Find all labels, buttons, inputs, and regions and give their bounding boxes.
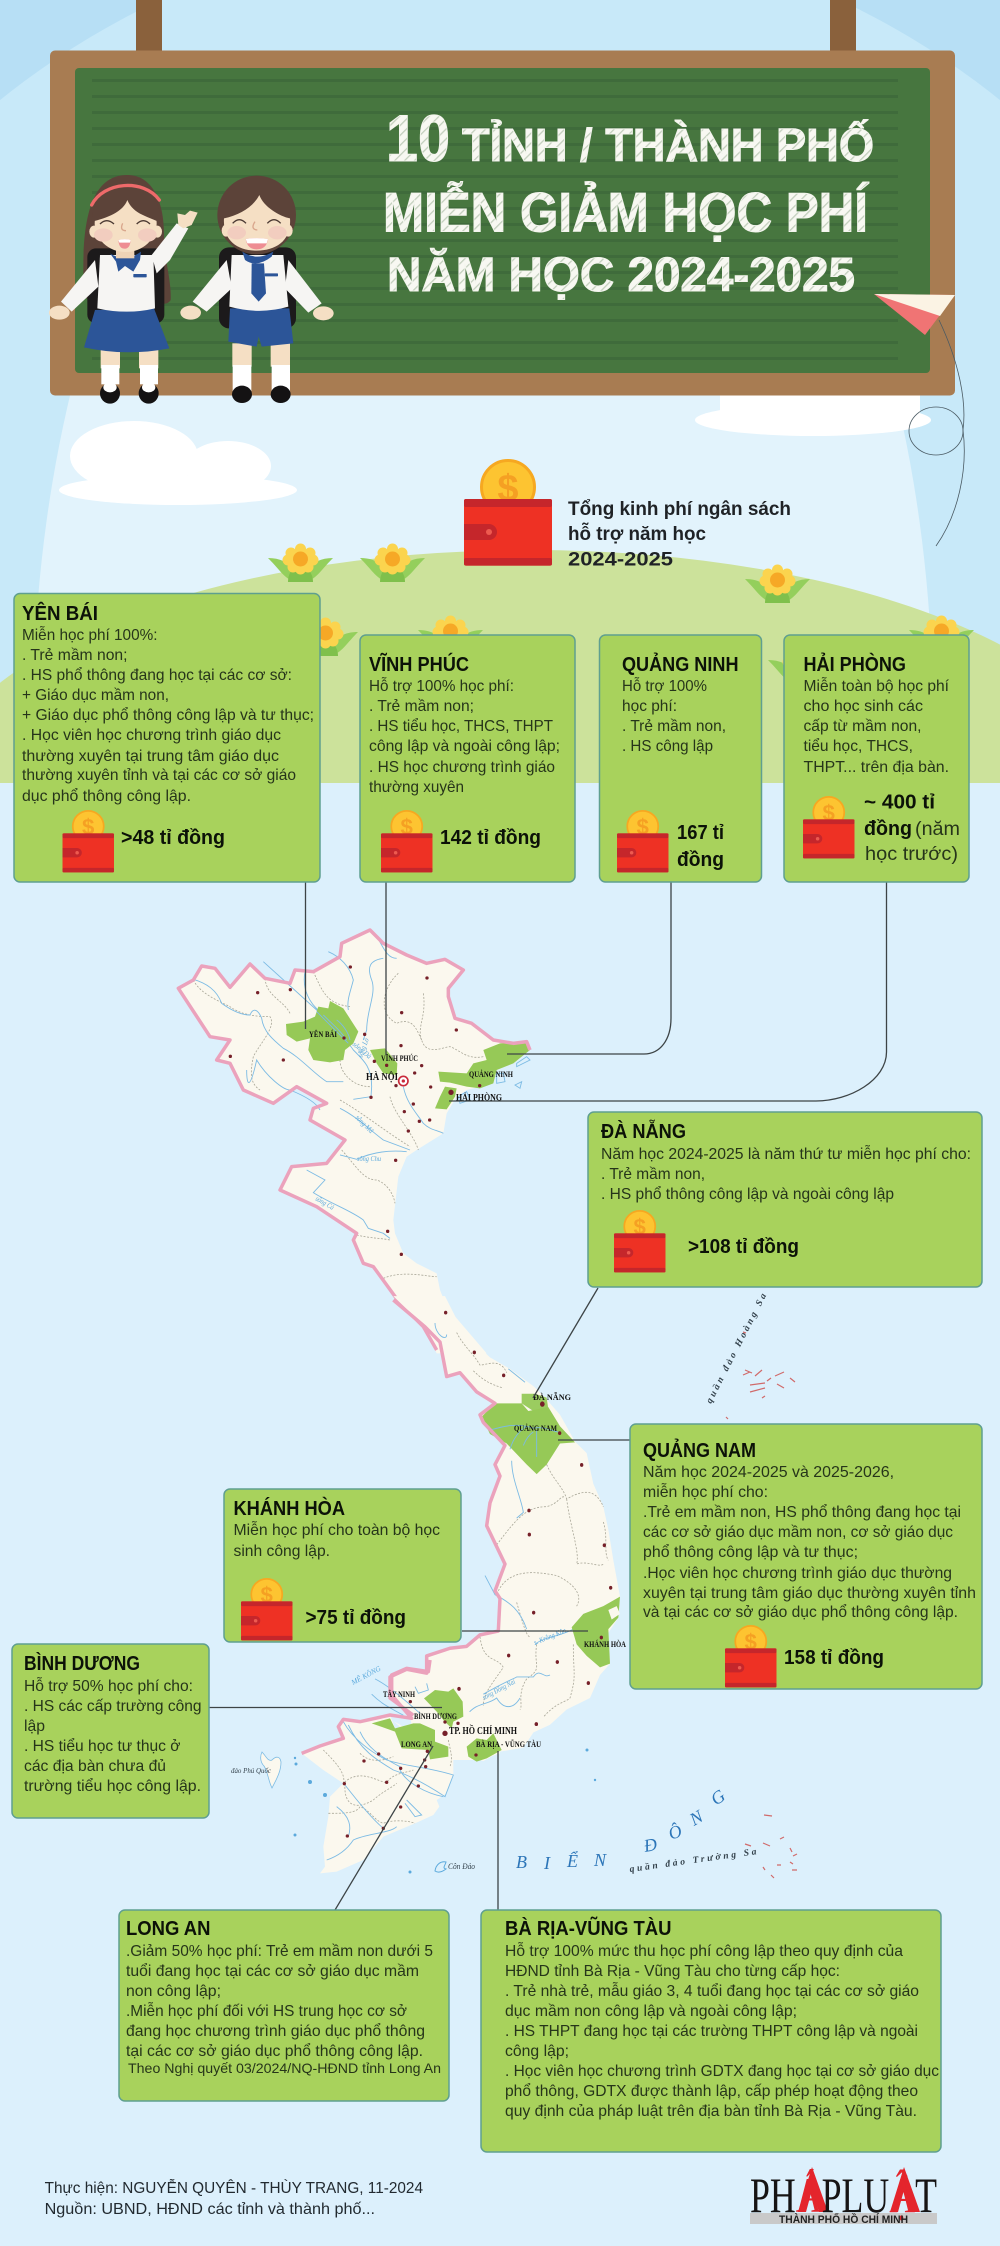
heading: Quảng Ninh: QUẢNG NINH [622, 653, 738, 676]
text: Yên Bái details: . Trẻ mầm non; [22, 647, 128, 664]
text: Vĩnh Phúc details: . HS học chương trình giáo [369, 759, 555, 776]
map place labels: sông Chu [357, 1154, 381, 1163]
map place labels: N [685, 1806, 707, 1830]
text: Quảng Nam details: .Trẻ em mầm non, HS phổ thông đang học tại [643, 1503, 961, 1521]
map place labels: BÀ RỊA - VŨNG TÀU [476, 1739, 541, 1749]
map place labels: HÀ NỘI [366, 1070, 398, 1083]
heading: Long An: LONG AN [126, 1918, 210, 1940]
title: NĂM HỌC 2024-2025 [387, 248, 855, 302]
text: Long An details [126, 1943, 433, 2060]
text: Bà Rịa-Vũng Tàu details: HĐND tỉnh Bà Rịa - Vũng Tàu cho từng cấp học: [505, 1963, 840, 1980]
text: Bà Rịa-Vũng Tàu details: dục mầm non công lập và ngoài công lập; [505, 2003, 797, 2020]
map place labels: Ô [665, 1820, 685, 1844]
note: legal reference: Theo Nghị quyết 03/2024/NQ-HĐND tỉnh Long An [128, 2060, 441, 2076]
amount: Đà Nẵng: >108 tỉ đồng [688, 1236, 799, 1258]
text: Hải Phòng details: Miễn toàn bộ học phí [804, 676, 950, 695]
text: Yên Bái details [22, 625, 314, 805]
text: Hải Phòng details: THPT... trên địa bàn. [804, 759, 949, 776]
title: 10 [386, 101, 450, 175]
map place labels: Côn Đảo [448, 1862, 475, 1871]
map: northern region [178, 930, 530, 1353]
heading: Hải Phòng: HẢI PHÒNG [804, 652, 906, 676]
text: Bình Dương details: . HS các cấp trường công [24, 1698, 202, 1715]
map place labels: TÂY NINH [383, 1689, 415, 1699]
map place labels: B [516, 1852, 527, 1872]
connector lines from panels to map [209, 882, 886, 1910]
logo: Pháp Luật: THÀNH PHỐ HỒ CHÍ MINH [779, 2212, 908, 2226]
text: Bình Dương details: . HS tiểu học tư thục ở [24, 1737, 181, 1755]
legend text: Tổng kinh phí ngân sách [568, 499, 791, 520]
text: Yên Bái details: thường xuyên tại trung tâm giáo dục [22, 748, 279, 765]
text: Bình Dương details [24, 1676, 202, 1795]
panel: Bình Dương [12, 1644, 209, 1818]
panel: Quảng Nam [630, 1424, 982, 1689]
title: TỈNH / THÀNH PHỐ [462, 119, 874, 171]
text: Yên Bái details: . HS phổ thông đang học tại các cơ sở: [22, 666, 292, 684]
amount: Hải Phòng [864, 792, 960, 865]
map place labels: Ể [566, 1850, 578, 1871]
text: Quảng Nam details: .Học viên học chương trình giáo dục thường [643, 1565, 952, 1582]
text: Quảng Ninh details: học phí: [622, 698, 677, 715]
map place labels: sông Đà [351, 1040, 374, 1061]
panel: Quảng Ninh [600, 635, 762, 882]
red island markers [726, 1332, 797, 1878]
flowers on hill [268, 544, 974, 684]
text: Yên Bái details: dục phổ thông công lập. [22, 787, 191, 805]
student girl [49, 175, 198, 404]
text: Quảng Nam details: và tại các cơ sở giáo dục phổ thông công lập. [643, 1603, 958, 1621]
credits and source [45, 2178, 423, 2218]
text: Khánh Hòa details [234, 1520, 440, 1560]
map of Vietnam [178, 930, 797, 1878]
icon: wallet Quảng Ninh [617, 811, 668, 872]
text: Quảng Ninh details: Hỗ trợ 100% [622, 676, 707, 695]
text: Quảng Ninh details: . Trẻ mầm non, [622, 718, 726, 735]
heading: Đà Nẵng: ĐÀ NẴNG [601, 1120, 686, 1143]
icon: wallet Yên Bái [63, 811, 114, 872]
amount: Hải Phòng: (năm [915, 819, 960, 840]
heading: Bà Rịa-Vũng Tàu: BÀ RỊA-VŨNG TÀU [505, 1916, 672, 1940]
map place labels [231, 1029, 769, 1875]
text: Quảng Nam details: các cơ sở giáo dục mầm non, cơ sở giáo dục [643, 1524, 953, 1541]
text: Quảng Nam details: xuyên tại trung tâm giáo dục thường xuyên tỉnh [643, 1585, 976, 1602]
text: Đà Nẵng details: Năm học 2024-2025 là năm thứ tư miễn học phí cho: [601, 1144, 971, 1163]
amount: Khánh Hòa: >75 tỉ đồng [306, 1607, 406, 1629]
text: Hải Phòng details [804, 676, 950, 776]
icon: wallet Đà Nẵng [614, 1211, 665, 1272]
map place labels: ĐÀ NẴNG [533, 1392, 571, 1402]
text: Hải Phòng details: cho học sinh các [804, 698, 923, 715]
map place labels: Đ [641, 1834, 658, 1856]
text: Yên Bái details: + Giáo dục mầm non, [22, 687, 169, 704]
text: Quảng Ninh details [622, 676, 726, 755]
panel: Long An [119, 1910, 449, 2101]
text: Long An details: non công lập; [126, 1983, 221, 2000]
text: Bình Dương details: Hỗ trợ 50% học phí cho: [24, 1676, 193, 1695]
text: Bà Rịa-Vũng Tàu details: công lập; [505, 2043, 569, 2060]
islands [261, 1332, 797, 1878]
credits and source: Nguồn: UBND, HĐND các tỉnh và thành phố... [45, 2201, 375, 2218]
map place labels: YÊN BÁI [309, 1029, 338, 1039]
map place labels: đảo Phú Quốc [231, 1766, 272, 1775]
text: Đà Nẵng details [601, 1144, 971, 1203]
text: Quảng Ninh details: . HS công lập [622, 738, 713, 755]
text: Yên Bái details: thường xuyên tỉnh và tại các cơ sở giáo [22, 767, 296, 784]
title: MIỄN GIẢM HỌC PHÍ [383, 180, 869, 244]
amount: Quảng Ninh: đồng [677, 849, 724, 871]
chalkboard [50, 50, 955, 396]
text: Vĩnh Phúc details: thường xuyên [369, 779, 464, 796]
text: Khánh Hòa details: sinh công lập. [234, 1543, 330, 1560]
text: Bà Rịa-Vũng Tàu details: . HS THPT đang học tại các trường THPT công lập và ngoài [505, 2023, 918, 2040]
text: Vĩnh Phúc details [369, 676, 560, 796]
paper plane with trail [874, 294, 964, 546]
text: Bình Dương details: trường tiểu học công lập. [24, 1777, 201, 1795]
text: Yên Bái details: Miễn học phí 100%: [22, 625, 158, 644]
map place labels: G [707, 1785, 729, 1809]
text: Long An details: .Miễn học phí đối với HS trung học cơ sở [126, 2001, 407, 2020]
map: central and southern region [372, 1296, 620, 1761]
text: Long An details: đang học chương trình giáo dục phổ thông [126, 2022, 425, 2040]
map place labels: MÊ KÔNG [348, 1663, 383, 1687]
text: Bà Rịa-Vũng Tàu details: . Học viên học chương trình GDTX đang học tại cơ sở giáo dục [505, 2063, 939, 2080]
logo: Pháp Luật: PHÁPLUẬT [750, 2167, 937, 2223]
text: Long An details: tuổi đang học tại các cơ sở giáo dục mầm [126, 1962, 419, 1980]
amount: Quảng Ninh: 167 tỉ [677, 822, 724, 844]
hill [0, 550, 1000, 783]
map place labels: HẢI PHÒNG [456, 1092, 503, 1104]
total budget legend [464, 460, 791, 570]
legend text: 2024-2025 [568, 550, 673, 570]
panel: Khánh Hòa [224, 1489, 461, 1642]
map place labels: s. Krông Kôn [532, 1626, 567, 1647]
amount: Hải Phòng: ~ 400 tỉ [864, 792, 935, 814]
map place labels: quần đảo Trường Sa [629, 1846, 757, 1875]
text: Bà Rịa-Vũng Tàu details: phổ thông, GDTX được thành lập, cấp phép hoạt động theo [505, 2082, 918, 2100]
text: Quảng Nam details: Năm học 2024-2025 và 2025-2026, [643, 1464, 894, 1481]
text: Bình Dương details: lập [24, 1718, 45, 1735]
map place labels: sông Cả [314, 1194, 336, 1212]
text: Vĩnh Phúc details: . HS tiểu học, THCS, THPT [369, 717, 553, 735]
map place labels: QUẢNG NAM [514, 1423, 557, 1433]
map place labels: N [593, 1850, 607, 1870]
icon: wallet Vĩnh Phúc [381, 811, 432, 872]
student boy [180, 176, 334, 403]
amount: Quảng Nam: 158 tỉ đồng [784, 1647, 884, 1669]
map place labels: LONG AN [401, 1739, 433, 1749]
text: Vĩnh Phúc details: Hỗ trợ 100% học phí: [369, 676, 514, 695]
heading: Quảng Nam: QUẢNG NAM [643, 1439, 756, 1462]
panel: Bà Rịa-Vũng Tàu [481, 1910, 941, 2152]
map place labels: TP. HỒ CHÍ MINH [449, 1724, 517, 1737]
cloud right [695, 392, 931, 436]
heading: Vĩnh Phúc: VĨNH PHÚC [369, 652, 469, 676]
text: Đà Nẵng details: . HS phổ thông công lập và ngoài công lập [601, 1185, 894, 1203]
map place labels: KHÁNH HÒA [584, 1639, 627, 1649]
heading: Bình Dương: BÌNH DƯƠNG [24, 1652, 140, 1675]
text: Bà Rịa-Vũng Tàu details [505, 1941, 939, 2120]
map place labels: VĨNH PHÚC [381, 1053, 418, 1063]
map place labels: sông Lô [355, 1037, 371, 1059]
map: Mekong delta [302, 1660, 538, 1873]
amount: Vĩnh Phúc: 142 tỉ đồng [440, 827, 541, 849]
text: Hải Phòng details: cấp từ mầm non, [804, 718, 922, 735]
cloud left [59, 421, 297, 505]
map place labels: BÌNH DƯƠNG [414, 1711, 457, 1721]
legend text [568, 499, 791, 570]
text: Yên Bái details: + Giáo dục phổ thông công lập và tư thục; [22, 706, 314, 724]
amount: Hải Phòng: đồng [864, 818, 912, 840]
icon: wallet with coin large [464, 460, 552, 566]
panel: Đà Nẵng [588, 1112, 982, 1287]
text: Vĩnh Phúc details: công lập và ngoài công lập; [369, 738, 560, 755]
text: Long An details: tại các cơ sở giáo dục phổ thông công lập. [126, 2042, 423, 2060]
text: Bà Rịa-Vũng Tàu details: Hỗ trợ 100% mức thu học phí công lập theo quy định của [505, 1941, 903, 1960]
amount: Quảng Ninh [677, 822, 724, 871]
text: Long An details: .Giảm 50% học phí: Trẻ em mầm non dưới 5 [126, 1943, 433, 1960]
background sky [0, 0, 1000, 682]
map place labels: QUẢNG NINH [469, 1069, 513, 1079]
panel: Hải Phòng [784, 635, 969, 882]
title [383, 101, 874, 302]
panel: Yên Bái [14, 594, 320, 882]
icon: wallet Khánh Hòa [241, 1579, 292, 1640]
text: Khánh Hòa details: Miễn học phí cho toàn bộ học [234, 1520, 440, 1539]
text: Bà Rịa-Vũng Tàu details: . Trẻ nhà trẻ, mẫu giáo 3, 4 tuổi đang học tại các cơ sở giáo [505, 1981, 919, 2000]
text: Hải Phòng details: tiểu học, THCS, [804, 737, 913, 755]
sign posts [136, 0, 856, 52]
map place labels: sông Đồng Nai [481, 1677, 517, 1702]
text: Quảng Nam details: phổ thông công lập và tư thục; [643, 1543, 858, 1561]
legend text: hỗ trợ năm học [568, 523, 706, 545]
credits and source: Thực hiện: NGUYỄN QUYÊN - THÙY TRANG, 11-2024 [45, 2178, 423, 2197]
amount: Hải Phòng: học trước) [865, 844, 958, 865]
heading: Yên Bái: YÊN BÁI [22, 601, 98, 625]
text: Vĩnh Phúc details: . Trẻ mầm non; [369, 698, 474, 715]
text: Đà Nẵng details: . Trẻ mầm non, [601, 1166, 705, 1183]
text: Bà Rịa-Vũng Tàu details: quy định của pháp luật trên địa bàn tỉnh Bà Rịa - Vũng Tàu. [505, 2103, 917, 2120]
amount: Yên Bái: >48 tỉ đồng [121, 827, 225, 849]
map place labels: I [543, 1853, 551, 1873]
icon: wallet Hải Phòng [803, 797, 854, 858]
text: Quảng Nam details: miễn học phí cho: [643, 1482, 768, 1501]
heading: Khánh Hòa: KHÁNH HÒA [234, 1496, 345, 1520]
text: Quảng Nam details [643, 1464, 976, 1621]
map place labels: quần đảo Hoàng Sa [704, 1291, 769, 1405]
icon: wallet Quảng Nam [725, 1626, 776, 1687]
text: Yên Bái details: . Học viên học chương trình giáo dục [22, 727, 281, 744]
text: Bình Dương details: các địa bàn chưa đủ [24, 1758, 166, 1775]
map place labels: sông Mã [354, 1113, 376, 1135]
panel: Vĩnh Phúc [360, 635, 575, 882]
